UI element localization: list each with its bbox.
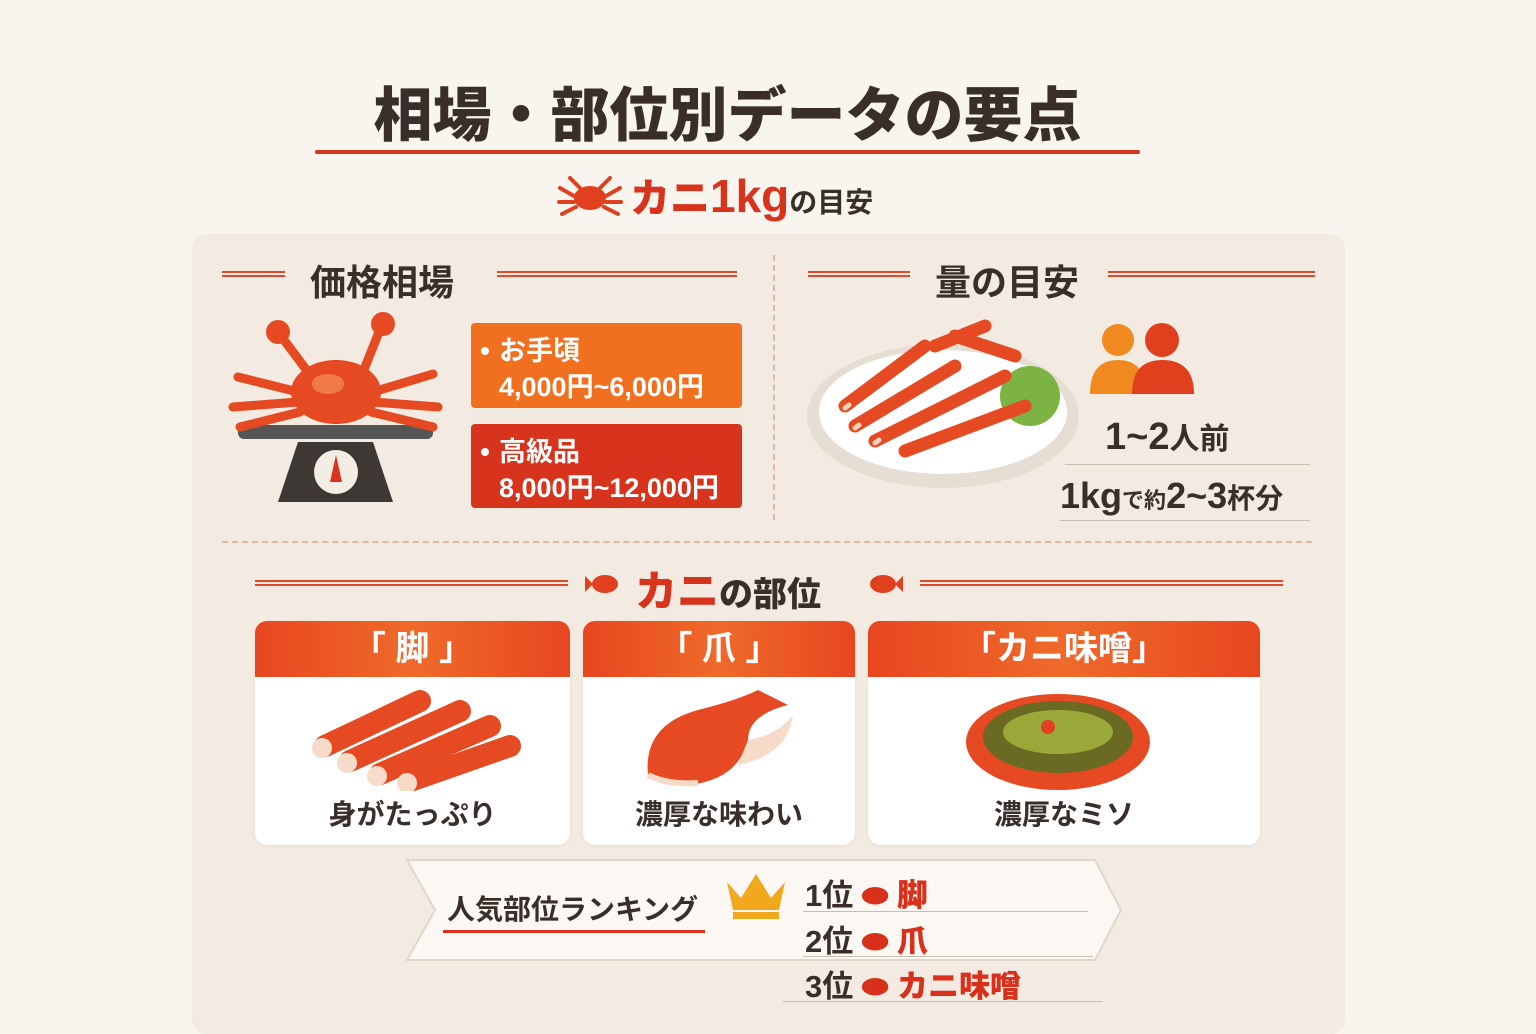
text: 1kgで約2~3杯分: 1kgで約2~3杯分	[1060, 475, 1283, 516]
icon: crab shell with miso	[966, 694, 1150, 790]
callout: お手頃: お手頃	[499, 336, 580, 366]
icon: legs	[312, 690, 521, 791]
callout: 高級品: 高級品	[499, 437, 580, 467]
card: 爪: 「 爪 」	[659, 630, 779, 668]
icon: claw	[646, 690, 793, 786]
callout: お手頃: 4,000円~6,000円	[499, 372, 704, 402]
card: カニ味噌	[868, 621, 1260, 845]
title: 相場・部位別データの要点	[373, 83, 1082, 149]
text: 3位 ⬬ カニ味噌	[805, 969, 1021, 1004]
panel: price	[222, 262, 742, 508]
callout: 高級品	[471, 424, 742, 508]
text: 1~2人前: 1~2人前	[1105, 416, 1229, 458]
icon: crab	[557, 176, 623, 216]
panel: amount	[807, 262, 1315, 521]
heading: カニの部位	[255, 568, 1283, 615]
heading: カニの部位: カニの部位	[635, 568, 821, 615]
subtitle: カニ1kgの目安	[630, 170, 873, 222]
ranking rows: 1位 ⬬ 脚	[805, 878, 928, 913]
callout: お手頃	[471, 323, 742, 408]
icon: crown	[727, 874, 785, 919]
icon: crab plate	[807, 320, 1079, 488]
card: カニ味噌: 「カニ味噌」	[962, 630, 1166, 668]
card: 脚: 身がたっぷり	[328, 799, 496, 830]
panel: main	[192, 234, 1345, 1034]
icon: crab on scale	[228, 312, 442, 502]
heading: 量の目安: 量の目安	[935, 262, 1079, 303]
card: カニ味噌: 濃厚なミソ	[994, 799, 1134, 830]
card: 爪	[583, 621, 855, 845]
text: 2位 ⬬ 爪	[805, 924, 928, 959]
callout: 高級品: 8,000円~12,000円	[499, 473, 719, 503]
ranking banner	[406, 859, 1122, 1002]
card: 爪: 濃厚な味わい	[635, 799, 803, 830]
card: 脚: 「 脚 」	[352, 630, 473, 668]
heading: 価格相場: 価格相場	[310, 262, 454, 303]
card: 脚	[255, 621, 570, 845]
icon: people	[1090, 323, 1194, 394]
text: 人気部位ランキング: 人気部位ランキング	[447, 894, 698, 925]
